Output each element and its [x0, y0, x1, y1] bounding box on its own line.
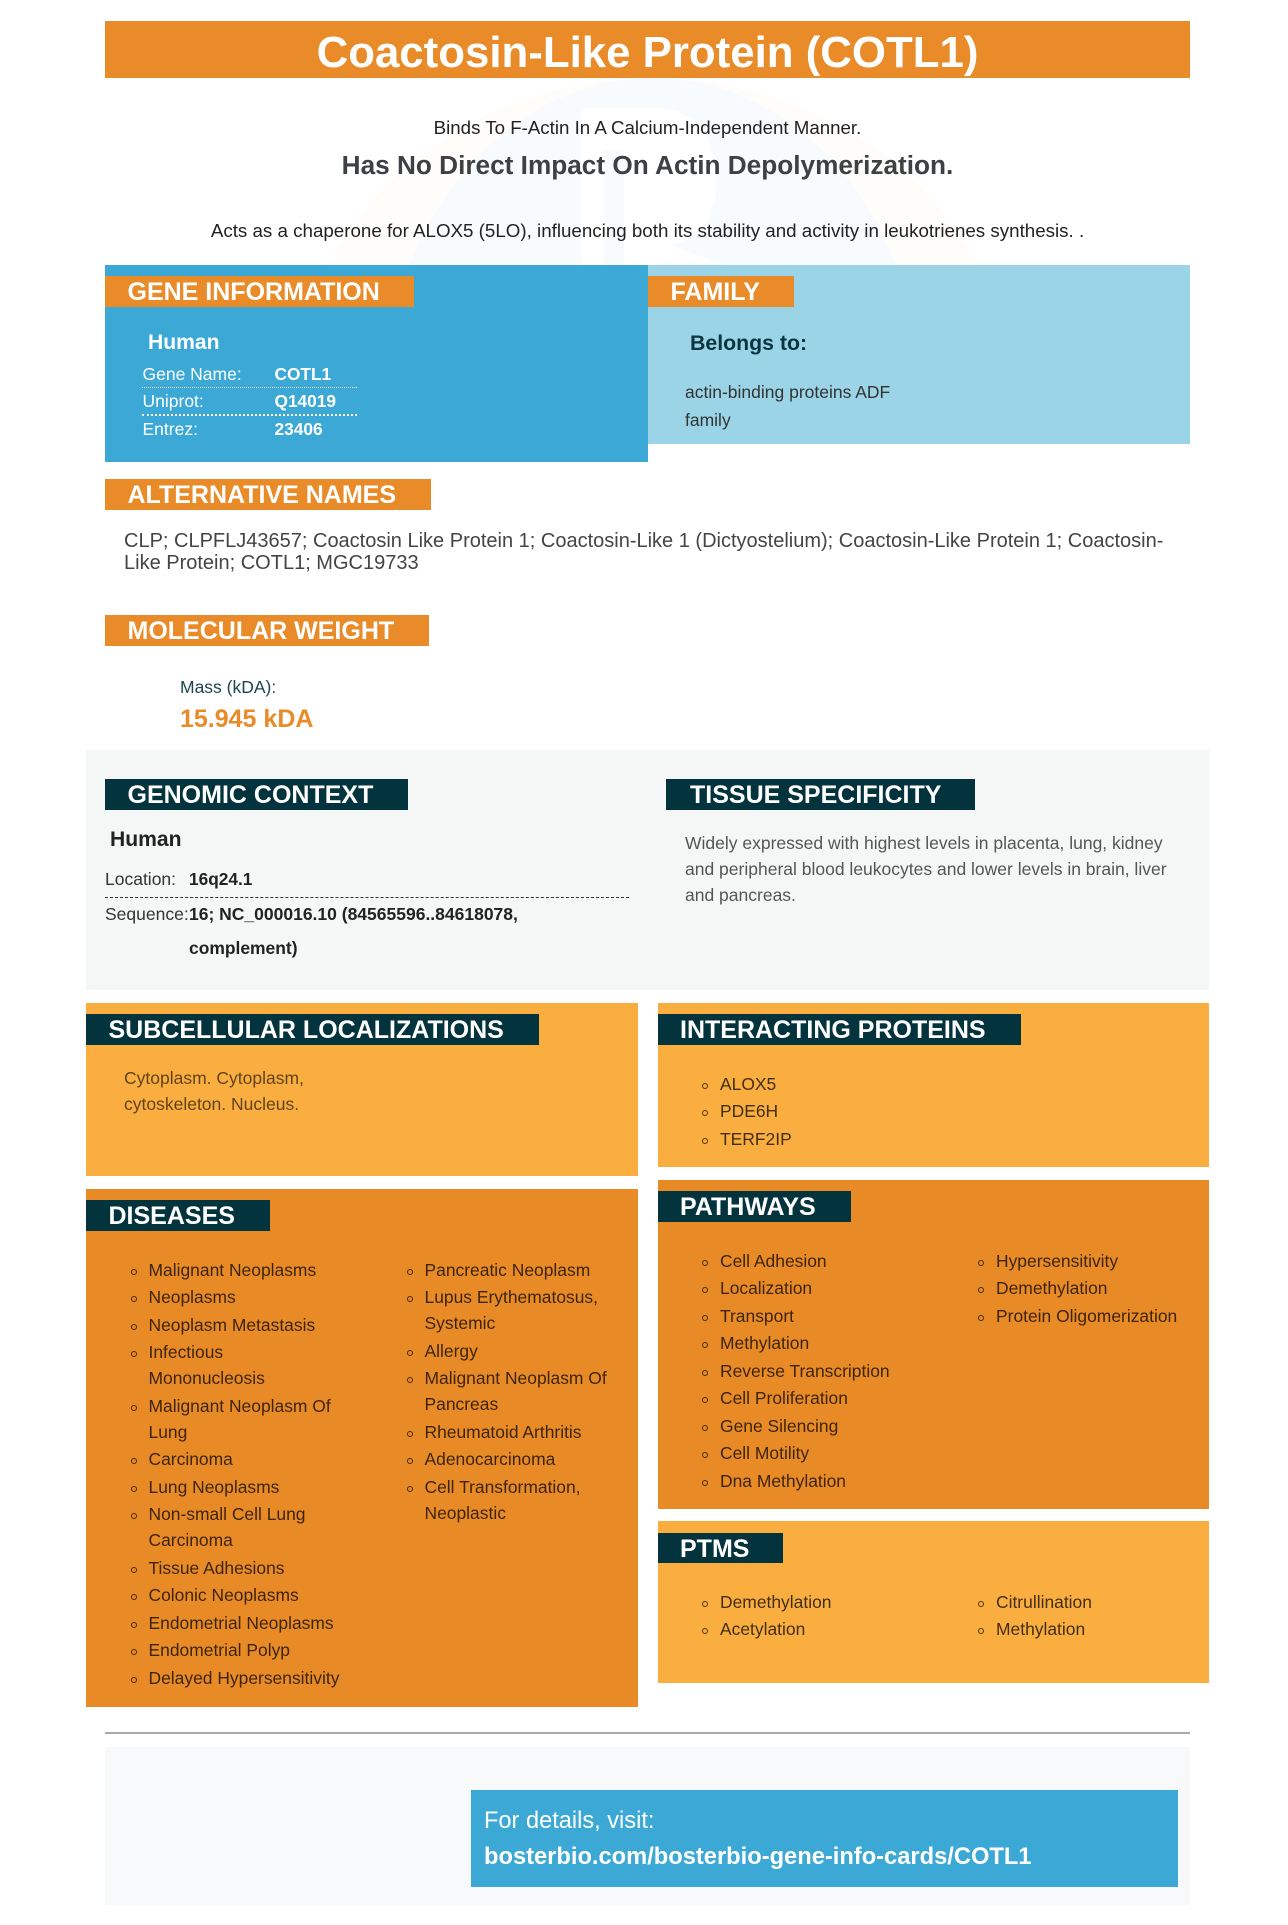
list: diseases column 2: Pancreatic Neoplasm: [424, 1260, 590, 1280]
sequence row: 16; NC_000016.10 (84565596..84618078,: [189, 904, 518, 924]
list: diseases column 2: Neoplastic: [424, 1502, 506, 1522]
panel: ptms: [658, 1521, 1209, 1683]
panel: pathways: [658, 1180, 1209, 1509]
list: diseases column 1: Carcinoma: [148, 1449, 233, 1469]
sequence row: complement): [189, 938, 298, 958]
panel: footer: [105, 1747, 1190, 1905]
list: diseases column 1: Mononucleosis: [148, 1368, 265, 1388]
list: diseases column 1: Malignant Neoplasm Of: [148, 1396, 331, 1416]
list: diseases column 1: [131, 1260, 340, 1688]
list: diseases column 2: Rheumatoid Arthritis: [424, 1422, 582, 1442]
subcellular text: Cytoplasm. Cytoplasm,: [124, 1068, 304, 1088]
heading: interacting proteins: INTERACTING PROTEINS: [680, 1016, 986, 1044]
family description: actin-binding proteins ADF: [685, 382, 890, 402]
heading: ptms: PTMS: [680, 1535, 749, 1563]
alternative names text: CLP; CLPFLJ43657; Coactosin Like Protein 1; Coactosin-Like 1 (Dictyostelium); Coactosin-Like Protein 1; Coactosin-: [124, 530, 1163, 552]
background watermark: [0, 0, 1288, 265]
entrez row: 23406: [274, 418, 323, 438]
gene name row: COTL1: [274, 364, 331, 384]
list: pathways column 2: [978, 1250, 1177, 1326]
panel: subcellular localizations: [86, 1003, 638, 1176]
list: pathways column 1: Reverse Transcription: [720, 1360, 890, 1380]
list: interacting proteins: PDE6H: [720, 1101, 778, 1121]
list: ptms column 2: [978, 1592, 1092, 1639]
title banner: [105, 21, 1190, 78]
gene name row: Gene Name:: [142, 364, 242, 384]
list: diseases column 1: Malignant Neoplasms: [148, 1260, 316, 1280]
heading: diseases: [86, 1200, 270, 1231]
list: ptms column 2: Methylation: [996, 1619, 1085, 1639]
list: diseases column 2: Lupus Erythematosus,: [424, 1287, 598, 1307]
list: diseases column 2: Pancreas: [424, 1394, 498, 1414]
list: pathways column 2: Protein Oligomerization: [996, 1306, 1177, 1326]
mass label: Mass (kDA):: [180, 677, 276, 697]
heading: family: [648, 276, 794, 307]
list: diseases column 1: Non-small Cell Lung: [148, 1504, 306, 1524]
list: diseases column 1: Carcinoma: [148, 1530, 233, 1550]
list: interacting proteins: TERF2IP: [720, 1128, 792, 1148]
location row: [105, 869, 252, 889]
subtitle: bold statement: Has No Direct Impact On Actin Depolymerization.: [342, 150, 953, 180]
heading: molecular weight: MOLECULAR WEIGHT: [128, 617, 394, 645]
sequence row: Sequence:: [105, 904, 189, 924]
list: diseases column 1: Endometrial Neoplasms: [148, 1612, 334, 1632]
visit label: For details, visit:: [484, 1808, 654, 1834]
entrez row: [142, 418, 323, 438]
list: pathways column 1: Cell Adhesion: [720, 1250, 827, 1270]
list: diseases column 2: [407, 1260, 607, 1522]
alternative names text: [124, 530, 1163, 574]
sequence row: [105, 904, 518, 958]
list: diseases column 1: Neoplasm Metastasis: [148, 1314, 315, 1334]
list: pathways column 1: Localization: [720, 1278, 812, 1298]
tissue specificity text: Widely expressed with highest levels in placenta, lung, kidney: [685, 833, 1163, 853]
list: ptms column 1: Acetylation: [720, 1619, 805, 1639]
belongs to label: Belongs to:: [690, 331, 807, 355]
list: diseases column 2: Malignant Neoplasm Of: [424, 1368, 607, 1388]
title banner: Coactosin-Like Protein (COTL1): [317, 28, 978, 77]
list: diseases column 1: Infectious: [148, 1342, 223, 1362]
list: pathways column 1: Cell Proliferation: [720, 1388, 848, 1408]
family description: family: [685, 410, 731, 430]
panel: genomic context and tissue specificity: [86, 750, 1209, 990]
list: diseases column 2: Allergy: [424, 1340, 478, 1360]
list: diseases column 1: Tissue Adhesions: [148, 1558, 285, 1578]
list: pathways column 2: Hypersensitivity: [996, 1250, 1118, 1270]
species label: Human: [110, 828, 182, 851]
species label: Human: [148, 331, 220, 354]
list: interacting proteins: ALOX5: [720, 1074, 776, 1094]
heading: gene information: GENE INFORMATION: [128, 278, 380, 306]
heading: genomic context: GENOMIC CONTEXT: [128, 781, 373, 809]
heading: tissue specificity: TISSUE SPECIFICITY: [690, 781, 941, 809]
uniprot row: Uniprot:: [142, 390, 204, 410]
entrez row: Entrez:: [142, 418, 198, 438]
mass value: 15.945 kDA: [180, 705, 313, 733]
tissue specificity text: and peripheral blood leukocytes and lower levels in brain, liver: [685, 859, 1167, 879]
list: pathways column 1: [702, 1250, 890, 1490]
subcellular text: [124, 1068, 304, 1114]
uniprot row: Q14019: [274, 390, 336, 410]
list: diseases column 2: Adenocarcinoma: [424, 1449, 555, 1469]
heading: family: FAMILY: [670, 278, 760, 306]
gene name row: [142, 364, 331, 384]
list: ptms column 1: Demethylation: [720, 1592, 831, 1612]
location row: 16q24.1: [189, 869, 252, 889]
heading: pathways: PATHWAYS: [680, 1193, 816, 1221]
panel: diseases: [86, 1189, 638, 1707]
heading: ptms: [658, 1533, 783, 1563]
list: diseases column 2: Cell Transformation,: [424, 1476, 581, 1496]
list: pathways column 1: Dna Methylation: [720, 1470, 846, 1490]
family description: [685, 382, 890, 430]
panel: family: [648, 265, 1190, 444]
list: pathways column 2: Demethylation: [996, 1278, 1107, 1298]
uniprot row: [142, 390, 336, 410]
url: bosterbio.com/bosterbio-gene-info-cards/COTL1: [484, 1844, 1031, 1870]
list: diseases column 1: Colonic Neoplasms: [148, 1585, 299, 1605]
list: diseases column 1: Delayed Hypersensitivity: [148, 1668, 339, 1688]
list: ptms column 1: [702, 1592, 831, 1639]
list: pathways column 1: Methylation: [720, 1333, 809, 1353]
list: pathways column 1: Gene Silencing: [720, 1416, 838, 1436]
alternative names text: Like Protein; COTL1; MGC19733: [124, 552, 419, 574]
list: ptms column 2: Citrullination: [996, 1592, 1092, 1612]
subcellular text: cytoskeleton. Nucleus.: [124, 1094, 299, 1114]
tissue specificity text: [685, 833, 1167, 905]
list: diseases column 1: Neoplasms: [148, 1287, 236, 1307]
location row: Location:: [105, 869, 176, 889]
list: pathways column 1: Transport: [720, 1306, 794, 1326]
function description: Acts as a chaperone for ALOX5 (5LO), influencing both its stability and activity in leukotrienes synthesis. .: [211, 220, 1084, 241]
list: diseases column 2: Systemic: [424, 1313, 495, 1333]
tissue specificity text: and pancreas.: [685, 885, 796, 905]
heading: alternative names: ALTERNATIVE NAMES: [128, 481, 396, 509]
heading: pathways: [658, 1191, 851, 1222]
list: diseases column 1: Lung: [148, 1422, 187, 1442]
panel: interacting proteins: [658, 1003, 1209, 1167]
list: interacting proteins: [702, 1074, 792, 1148]
heading: subcellular localizations: SUBCELLULAR LOCALIZATIONS: [108, 1016, 504, 1044]
list: diseases column 1: Lung Neoplasms: [148, 1476, 279, 1496]
callout: details link: [471, 1790, 1178, 1887]
list: pathways column 1: Cell Motility: [720, 1443, 809, 1463]
panel: gene information: [105, 265, 648, 462]
heading: diseases: DISEASES: [108, 1202, 235, 1230]
subtitle: binding summary: Binds To F-Actin In A Calcium-Independent Manner.: [434, 117, 861, 138]
list: diseases column 1: Endometrial Polyp: [148, 1640, 290, 1660]
